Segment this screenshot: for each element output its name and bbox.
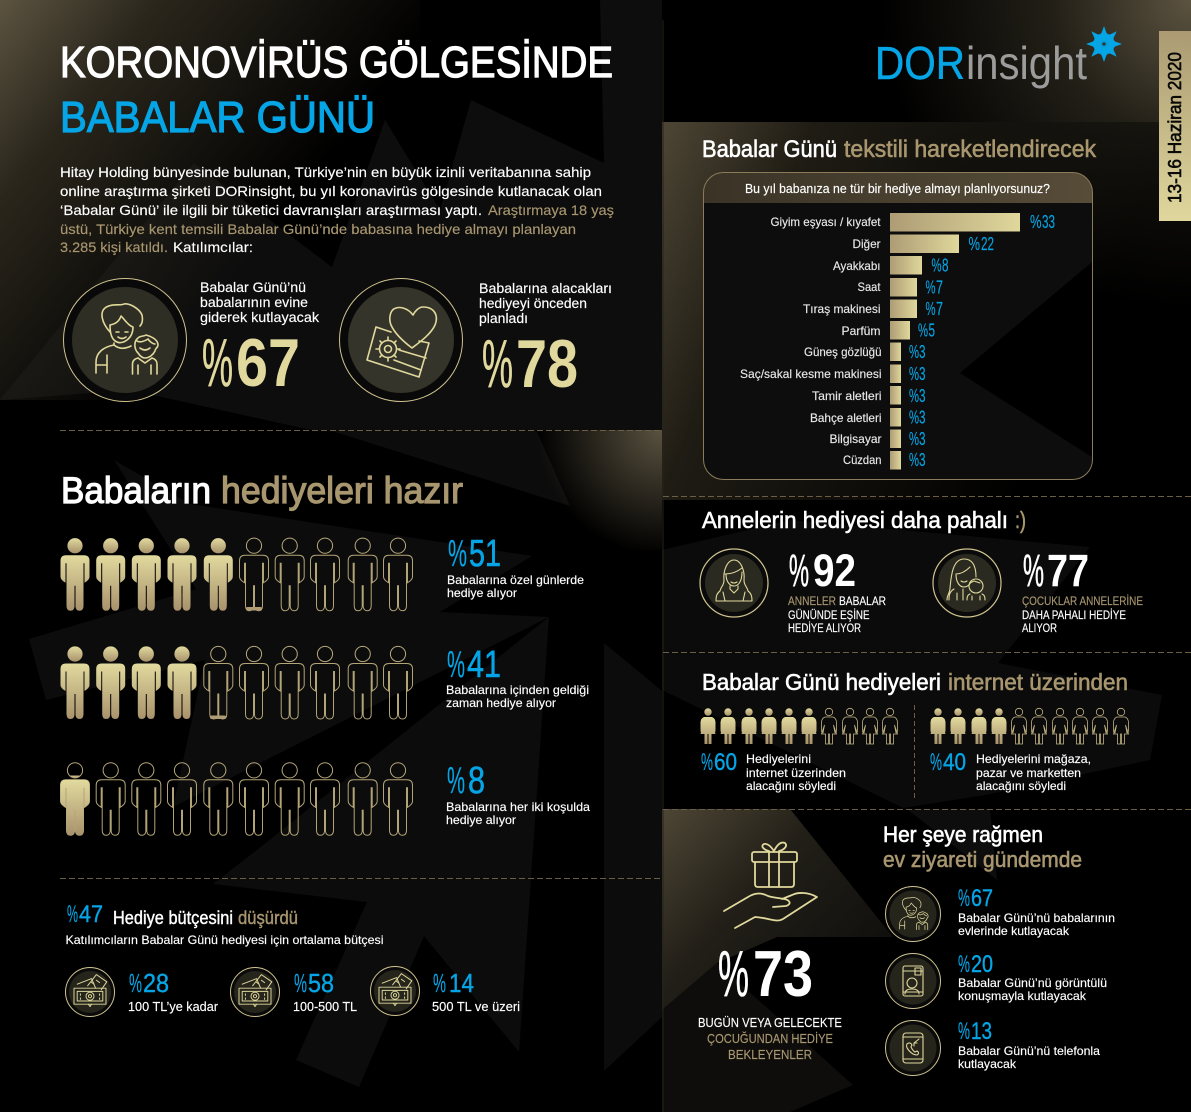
title [60,38,613,142]
heading: home visit: ev ziyareti gündemde [883,847,1082,872]
stat: 92 percent: GÜNÜNDE EŞİNE [788,609,870,622]
bar chart: Ayakkabı [833,259,880,273]
stat: 60 percent: Hediyelerini [746,752,811,766]
stat 41 percent [446,644,589,710]
bar chart: % [909,364,919,384]
panel: gift type chart [704,172,1092,480]
stat: visit father: giderek kutlayacak [200,309,320,325]
item: 20 percent video call [886,951,1107,1008]
heading: textile [702,136,1097,163]
pictogram row 41 percent [60,646,412,719]
icon: video call phone [886,954,940,1008]
stat: planned gift: % [482,326,513,402]
icon: mother [700,549,768,617]
stat: 92 percent: % [789,545,809,596]
stat 8 percent: hediye alıyor [446,813,516,827]
pictogram: 60 percent online [700,708,898,744]
stat: 73 percent: ÇOCUĞUNDAN HEDİYE [707,1031,833,1046]
item: 67 percent at home: Babalar Günü’nü babalarının [958,911,1115,925]
budget heading: % [67,901,78,928]
stat 8 percent: % [447,760,465,802]
budget item 58 percent: % [294,968,307,998]
stat: 60 percent: internet üzerinden [746,766,846,780]
bar chart: Saat [858,280,881,294]
bar chart: % [909,408,919,428]
stat: visit father: Babalar Günü’nü [200,279,306,295]
item: 13 percent phone call: Babalar Günü’nü telefonla [958,1044,1100,1058]
bar chart: 3 [919,386,926,406]
budget item 14 percent: 14 [449,968,474,998]
icon: father and son [64,278,186,402]
stat: 92 percent: HEDİYE ALIYOR [788,622,861,635]
stat: 40 percent [930,749,1091,793]
stat 41 percent: zaman hediye alıyor [446,696,556,710]
heading: textile: tekstili hareketlendirecek [844,136,1097,163]
item: 20 percent video call: % [958,951,970,978]
stat: 77 percent [933,545,1143,635]
heading: textile: Babalar Günü [702,136,837,163]
budget item 28 percent: 100 TL’ye kadar [128,999,219,1014]
budget item 14 percent: 500 TL ve üzeri [432,999,520,1014]
intro paragraph: üstü, Türkiye kent temsili Babalar Günü’nde babasına hediye almayı planlayan [60,221,576,237]
budget heading: 47 [79,901,103,928]
intro paragraph [60,164,614,255]
budget item 28 percent [66,968,219,1016]
item: 13 percent phone call: kutlayacak [958,1057,1017,1071]
stat: 92 percent: ANNELER [788,596,836,608]
bar chart: Saç/sakal kesme makinesi [740,367,882,381]
bar chart: % [926,299,936,319]
heading: online: internet üzerinden [948,669,1128,695]
icon: money [370,966,420,1016]
bar chart: 7 [936,299,943,319]
bar chart: % [909,429,919,449]
item: 13 percent phone call: % [958,1018,970,1045]
stat: 77 percent: DAHA PAHALI HEDİYE [1022,609,1126,622]
budget heading [66,901,384,947]
pictogram row 8 percent [60,763,412,835]
bar chart: % [909,450,919,470]
bar chart: Tamir aletleri [812,389,882,403]
item: 13 percent phone call [886,1018,1100,1076]
date tab: 13-16 Haziran 2020 [1165,52,1185,203]
stat 51 percent: Babalarına özel günlerde [447,573,584,587]
intro paragraph: Araştırmaya 18 yaş [488,202,614,218]
bar chart: Parfüm [842,324,880,338]
icon: phone call [886,1020,940,1076]
stat: 60 percent: % [701,749,713,776]
intro paragraph: 3.285 kişi katıldı. [60,239,168,255]
stat 51 percent: 51 [469,533,501,575]
stat: 40 percent: Hediyelerini mağaza, [976,752,1091,766]
bar chart: 3 [919,450,926,470]
icon: gift in hand [724,843,817,928]
stat 51 percent: hediye alıyor [447,586,517,600]
stat: 73 percent [698,937,842,1062]
item: 67 percent at home: 67 [971,885,993,912]
stat 8 percent: Babalarına her iki koşulda [446,800,590,814]
bar chart: 8 [942,256,948,276]
stat: visit father [64,278,320,402]
bar chart: Cüzdan [843,453,882,467]
pictogram row 51 percent [60,538,412,611]
icon: money [66,968,114,1016]
stat: 40 percent: % [930,749,942,776]
budget item 58 percent [230,968,357,1016]
bar chart: Giyim eşyası / kıyafet [770,215,881,229]
title: KORONOVİRÜS GÖLGESİNDE [60,38,613,87]
bar chart: Diğer [852,237,880,251]
stat: 73 percent: BEKLEYENLER [728,1047,812,1062]
logo: DORinsight: DOR [875,37,965,89]
bar chart: % [918,320,928,340]
bar chart: % [968,234,980,254]
heading: gifts ready: hediyeleri hazır [221,470,463,511]
heading: home visit: Her şeye rağmen [883,822,1043,847]
bar chart: Güneş gözlüğü [804,345,882,359]
stat: planned gift: 78 [516,326,578,402]
bar chart: 3 [919,429,926,449]
bar chart: 3 [919,342,926,362]
bar chart: 33 [1042,212,1055,232]
stat: 77 percent: 77 [1047,545,1089,596]
budget heading: Hediye bütçesini [113,908,233,928]
stat: 77 percent: % [1023,545,1044,596]
bar chart: 3 [919,408,926,428]
stat 51 percent: % [448,533,467,575]
heading: online [702,669,1128,695]
stat: 60 percent: alacağını söyledi [746,779,836,793]
icon: heart and gift [340,278,462,402]
bar chart: % [909,342,919,362]
budget heading: düşürdü [238,908,298,928]
bar chart: % [926,278,936,298]
stat: planned gift: planladı [479,310,528,326]
stat: 60 percent [701,749,846,793]
intro paragraph: online araştırma şirketi DORinsight, bu yıl koronavirüs gölgesinde kutlanacak olan [60,183,602,199]
heading: gifts ready: Babaların [61,470,211,511]
stat: planned gift [340,278,612,402]
bar chart: 22 [981,234,994,254]
heading: mothers: Annelerin hediyesi daha pahalı [702,507,1008,533]
stat 41 percent: 41 [467,644,501,686]
stat: 40 percent: alacağını söyledi [976,779,1066,793]
bar chart: Tıraş makinesi [803,302,880,316]
heading: online: Babalar Günü hediyeleri [702,669,941,695]
bar chart: % [932,256,942,276]
stat: 73 percent: BUGÜN VEYA GELECEKTE [698,1015,842,1030]
panel: gift type chart: Bu yıl babanıza ne tür bir hediye almayı planlıyorsunuz? [745,182,1050,196]
budget item 28 percent: 28 [143,968,169,998]
stat: visit father: 67 [236,325,300,401]
bar chart: Bilgisayar [830,432,882,446]
bar chart: % [909,386,919,406]
budget item 58 percent: 100-500 TL [293,999,357,1014]
bar chart: % [1030,212,1042,232]
icon: snowflake [1086,26,1122,62]
stat: 77 percent: ÇOCUKLAR ANNELERİNE [1022,595,1143,608]
item: 20 percent video call: 20 [971,951,993,978]
stat: planned gift: hediyeyi önceden [479,295,587,311]
intro paragraph: ‘Babalar Günü’ ile ilgili bir tüketici davranışları araştırması yaptı. [60,202,482,218]
pictogram: 40 percent stores [930,708,1128,744]
bar chart: 7 [936,278,943,298]
item: 67 percent at home: evlerinde kutlayacak [958,924,1070,938]
icon: father and son [886,886,940,942]
budget item 28 percent: % [129,968,142,998]
budget item 14 percent: % [433,968,446,998]
item: 13 percent phone call: 13 [971,1018,992,1045]
icon: money [230,968,280,1016]
stat: 73 percent: % [718,937,749,1010]
stat: 60 percent: 60 [714,749,737,776]
stat: 77 percent: ALIYOR [1022,623,1057,635]
bar chart [740,212,1055,470]
stat: 92 percent [700,545,886,635]
date tab [1159,31,1191,221]
stat 8 percent [446,760,590,827]
budget item 58 percent: 58 [308,968,334,998]
logo: DORinsight: insight [966,37,1087,89]
stat 41 percent: % [447,644,465,686]
budget heading: Katılımcıların Babalar Günü hediyesi için ortalama bütçesi [66,933,384,947]
stat 41 percent: Babalarına içinden geldiği [446,683,589,697]
stat 8 percent: 8 [468,760,485,802]
icon: mother and child [933,549,1001,617]
stat: 92 percent: 92 [813,545,856,596]
bar chart: Bahçe aletleri [810,411,882,425]
item: 67 percent at home: % [958,885,970,912]
item: 67 percent at home [886,885,1115,942]
intro paragraph: Hitay Holding bünyesinde bulunan, Türkiye’nin en büyük izinli veritabanına sahip [60,164,591,180]
budget item 14 percent [370,966,520,1016]
stat: visit father: babalarının evine [200,294,308,310]
logo: DORinsight [875,26,1122,89]
item: 20 percent video call: Babalar Günü’nü görüntülü [958,976,1107,990]
stat: visit father: % [202,325,233,401]
stat 51 percent [447,533,584,600]
item: 20 percent video call: konuşmayla kutlayacak [958,989,1087,1003]
stat: 40 percent: 40 [943,749,966,776]
title: BABALAR GÜNÜ [60,93,375,142]
heading: mothers: :) [1015,507,1026,533]
heading: home visit [883,822,1082,872]
bar chart: 3 [919,364,926,384]
bar chart: 5 [928,320,935,340]
stat: 92 percent: BABALAR [839,596,886,608]
stat: 73 percent: 73 [753,937,813,1010]
stat: planned gift: Babalarına alacakları [479,280,612,296]
heading: gifts ready [61,470,463,511]
stat: 40 percent: pazar ve marketten [976,766,1081,780]
intro paragraph: Katılımcılar: [173,239,253,255]
